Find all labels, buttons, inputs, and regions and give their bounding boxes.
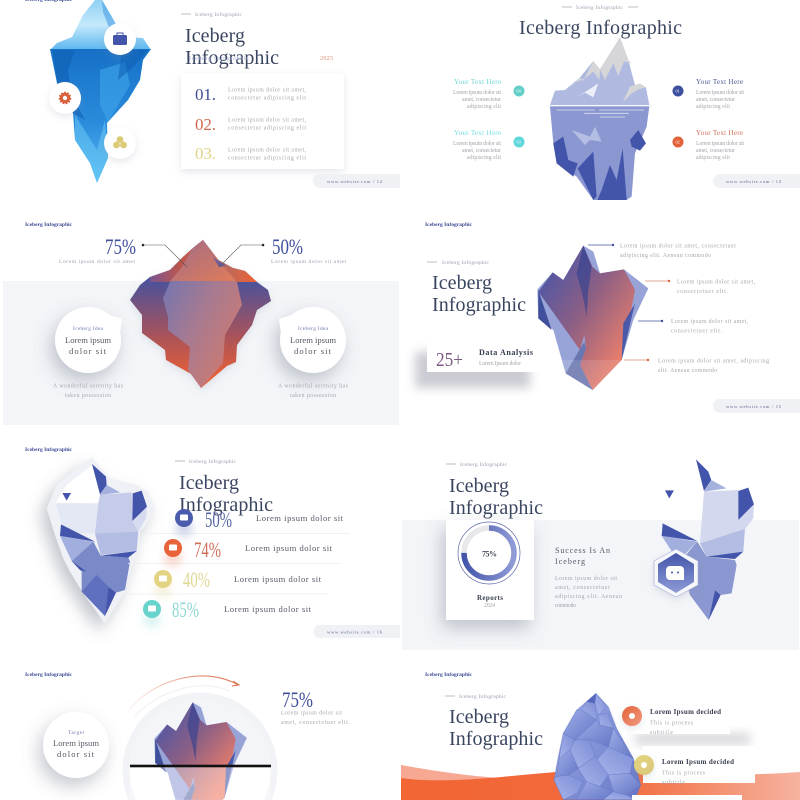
card: item 2: This is process xyxy=(662,770,706,776)
title: Iceberg xyxy=(432,272,492,294)
title: Infographic xyxy=(449,497,543,519)
section label: Iceberg Infographic xyxy=(442,259,490,266)
row: 40%: 40% xyxy=(183,567,210,592)
stat: 75%: amet, consectetuer elit. xyxy=(281,720,351,726)
icon: low-poly iceberg xyxy=(47,457,155,623)
card: numbered list: 03. xyxy=(195,144,216,163)
title xyxy=(432,272,526,316)
title: Iceberg xyxy=(185,25,245,47)
note 3 xyxy=(638,319,749,334)
caption: right: A wonderful serenity has xyxy=(278,382,349,390)
card: item 1 xyxy=(622,706,750,745)
header: Iceberg Infographic xyxy=(25,222,73,228)
footer pill xyxy=(713,174,800,188)
section label xyxy=(445,693,507,700)
waterline xyxy=(130,765,271,767)
text block: success: Lorem ipsum dolor sit xyxy=(555,576,617,582)
footer pill: www.website.com / 15 xyxy=(726,404,782,409)
section label: Iceberg Infographic xyxy=(460,461,508,468)
title: Iceberg xyxy=(449,706,509,728)
footer pill: www.website.com / 12 xyxy=(327,179,383,184)
card: item 1: Lorem Ipsum decided xyxy=(650,708,721,716)
text block: success: commodo xyxy=(555,603,576,609)
icon: faceted iceberg xyxy=(554,693,641,800)
card: reports donut: 2024 xyxy=(484,603,495,609)
title: Infographic xyxy=(179,494,273,516)
card: item 2 xyxy=(634,746,755,786)
water veil xyxy=(130,767,271,800)
card: item 2: subtitle xyxy=(662,780,685,786)
stat: 50%: 50% xyxy=(272,234,303,259)
header: Iceberg Infographic xyxy=(25,672,73,678)
note: right bottom: adipiscing elit xyxy=(696,155,730,161)
icon: briefcase circle xyxy=(104,23,136,55)
stat: 75%: Lorem ipsum dolor sit amet xyxy=(59,259,135,265)
panel: slide 19 faceted iceberg over waves xyxy=(401,672,800,800)
card: 25+ xyxy=(415,342,540,388)
footer pill xyxy=(314,625,400,638)
row: 74%: Lorem ipsum dolor sit xyxy=(245,543,333,553)
note: left bottom: amet, consectetur xyxy=(462,148,501,154)
note: left top xyxy=(453,78,524,110)
footer pill xyxy=(313,174,400,188)
stat: 75% xyxy=(281,687,351,726)
icon: periwinkle iceberg xyxy=(548,37,653,200)
card: reports donut xyxy=(446,520,534,620)
note: right top: 01 xyxy=(676,88,680,94)
note: right bottom xyxy=(672,129,744,161)
note 3: consectetuer elit. xyxy=(671,328,723,334)
faint subtitle: Iceberg Infographic xyxy=(189,55,249,62)
row: 50%: Lorem ipsum dolor sit xyxy=(256,513,344,523)
card: numbered list: consectetur adipiscing elit xyxy=(228,96,306,102)
panel: slide 14 gradient iceberg with percents xyxy=(3,222,399,425)
note: right top: Your Text Here xyxy=(696,78,743,86)
title xyxy=(179,472,273,516)
icon: hexagon chat xyxy=(654,549,698,597)
note: right top: Lorem ipsum dolor sit xyxy=(696,90,744,96)
card: 25+: Data Analysis xyxy=(479,348,533,357)
panel: slide 17 success card xyxy=(402,459,799,650)
card: reports donut: Reports xyxy=(477,594,503,602)
row: 50%: 50% xyxy=(205,507,232,532)
note: left bottom: 03 xyxy=(516,140,521,144)
grey band xyxy=(3,281,399,425)
caption: left: A wonderful serenity has xyxy=(53,382,124,390)
card: numbered list: 01. xyxy=(195,85,216,104)
card: numbered list: consectetur adipiscing elit xyxy=(228,126,306,132)
note 4: Lorem ipsum dolor sit amet, adipiscing xyxy=(658,358,769,364)
footer pill: www.website.com / 16 xyxy=(327,630,383,634)
note: right bottom: Lorem ipsum dolor sit xyxy=(696,141,744,147)
icon: gear circle xyxy=(49,82,81,114)
note: right top: amet, consectetur xyxy=(696,97,735,103)
header: Iceberg Infographic xyxy=(425,672,473,678)
icon: gradient iceberg xyxy=(537,246,648,390)
title: Infographic xyxy=(432,294,526,316)
card: item 2: Lorem Ipsum decided xyxy=(662,758,734,766)
caption: right xyxy=(278,382,349,399)
row: 74%: 74% xyxy=(194,537,221,562)
card: numbered list: Lorem ipsum dolor sit amet, xyxy=(228,88,307,94)
note 3: Lorem ipsum dolor sit amet, xyxy=(671,319,749,325)
note 2: consectetuer elit. xyxy=(677,289,729,295)
caption: left: taken possession xyxy=(65,393,111,399)
title: Iceberg xyxy=(449,475,509,497)
icon: gradient iceberg xyxy=(154,702,247,800)
circle: background disc xyxy=(122,693,278,800)
callout: target: Lorem ipsum xyxy=(53,738,99,748)
callout: right bubble: Lorem ipsum xyxy=(290,335,336,345)
note: left top: amet, consectetur xyxy=(462,97,501,103)
card: reports donut: 75% xyxy=(482,550,497,558)
callout: right bubble: Iceberg Idea xyxy=(298,326,329,332)
section label: Iceberg Infographic xyxy=(189,458,237,465)
stat: 75%: 75% xyxy=(282,687,313,712)
note 4 xyxy=(624,358,769,374)
stat: 75% xyxy=(59,234,187,267)
title xyxy=(449,475,543,519)
note: left bottom xyxy=(453,129,524,161)
icon: clover circle xyxy=(104,127,136,159)
note 1 xyxy=(588,244,736,259)
card: item 1: subtitle xyxy=(650,730,673,736)
stat: 75%: Lorem ipsum dolor sit xyxy=(281,710,342,716)
note: left top: Your Text Here xyxy=(454,78,501,86)
text block: success xyxy=(555,546,622,609)
text block: success: Success Is An xyxy=(555,546,610,555)
caption: left xyxy=(53,382,124,399)
row: 85% xyxy=(143,597,312,627)
section label xyxy=(175,458,237,465)
note: right top xyxy=(672,78,744,110)
callout: left bubble: Lorem ipsum xyxy=(65,335,111,345)
note: right bottom: Your Text Here xyxy=(696,129,743,137)
text block: success: amet, consectetuer xyxy=(555,585,610,591)
caption: right: taken possession xyxy=(290,393,336,399)
note 1: adipiscing elit. Aenean commodo xyxy=(620,253,711,259)
panel: slide 15 iceberg with leader notes xyxy=(415,222,800,413)
icon: low-poly iceberg xyxy=(662,459,754,620)
title: Infographic xyxy=(185,47,279,69)
note: left bottom: Your Text Here xyxy=(454,129,501,137)
note: right bottom: 02 xyxy=(676,140,680,144)
panel: slide 13 iceberg with four notes xyxy=(453,4,800,200)
note: left top: Lorem ipsum dolor sit xyxy=(453,90,501,96)
card: numbered list: Lorem ipsum dolor sit amet, xyxy=(228,148,307,154)
icon: arrows arc xyxy=(128,676,239,716)
note: left bottom: Lorem ipsum dolor sit xyxy=(453,141,501,147)
row: 50% xyxy=(138,507,350,536)
section label: Iceberg Infographic xyxy=(459,693,507,700)
footer pill: www.website.com / 13 xyxy=(726,179,782,184)
row: 85%: 85% xyxy=(172,597,199,622)
card: numbered list: consectetur adipiscing elit xyxy=(228,156,306,162)
waves xyxy=(401,765,800,800)
panel: slide 16 low-poly iceberg with percent list xyxy=(25,447,400,638)
note 1: Lorem ipsum dolor sit amet, consectetuer xyxy=(620,244,736,250)
note: left top: 04 xyxy=(516,88,522,94)
text block: success: adipiscing elit. Aenean xyxy=(555,594,622,600)
callout: left bubble: dolor sit xyxy=(69,346,107,356)
title xyxy=(185,25,279,69)
note: right bottom: amet, consectetur xyxy=(696,148,735,154)
panel: slide 18 target circle xyxy=(25,672,351,800)
note: left top: adipiscing elit xyxy=(467,104,501,110)
note: left bottom: adipiscing elit xyxy=(467,155,501,161)
card: numbered list: Lorem ipsum dolor sit amet, xyxy=(228,118,307,124)
note 2: Lorem ipsum dolor sit amet, xyxy=(677,280,756,286)
card: item 3 xyxy=(632,795,742,800)
callout: target xyxy=(43,712,109,778)
text block: success: Iceberg xyxy=(555,557,585,566)
callout: right bubble: dolor sit xyxy=(294,346,332,356)
stat: 75%: 75% xyxy=(105,234,136,259)
card: 25+: 25+ xyxy=(436,349,463,371)
row: 40%: Lorem ipsum dolor sit xyxy=(234,574,322,584)
section label: Iceberg Infographic xyxy=(195,11,243,18)
title: Iceberg Infographic xyxy=(519,17,682,39)
header: Iceberg Infographic xyxy=(25,447,73,453)
callout: right bubble xyxy=(279,307,346,373)
row: 40% xyxy=(119,567,329,597)
section label xyxy=(181,11,243,18)
stat: 50% xyxy=(219,234,346,267)
note 2 xyxy=(645,280,756,295)
card: numbered list: 02. xyxy=(195,115,216,134)
title: Iceberg xyxy=(179,472,239,494)
icon: gradient iceberg xyxy=(130,240,271,388)
section label xyxy=(427,259,490,266)
note: right top: adipiscing elit xyxy=(696,104,730,110)
row: 74% xyxy=(128,537,340,566)
note 4: elit. Aenean commodo xyxy=(658,368,717,374)
card: numbered list xyxy=(181,73,344,169)
section label xyxy=(562,4,638,11)
card: 25+: Lorem Ipsum dolor xyxy=(479,361,521,367)
title xyxy=(449,706,543,750)
stat: 50%: Lorem ipsum dolor sit amet xyxy=(271,259,346,265)
card: item 1: This is process xyxy=(650,720,694,726)
section label xyxy=(446,461,508,468)
title: Infographic xyxy=(449,728,543,750)
header: Iceberg Infographic xyxy=(425,222,473,228)
callout: target: dolor sit xyxy=(57,749,95,759)
callout: left bubble xyxy=(55,307,122,373)
callout: left bubble: Iceberg Idea xyxy=(73,326,104,332)
grey band xyxy=(402,520,799,650)
footer pill xyxy=(713,399,800,413)
row: 85%: Lorem ipsum dolor sit xyxy=(224,604,312,614)
year: 2025 xyxy=(320,56,333,62)
callout: target: Target xyxy=(68,730,85,736)
panel: slide 12 blue iceberg xyxy=(25,0,400,188)
icon: blue iceberg xyxy=(50,0,151,183)
section label: Iceberg Infographic xyxy=(576,4,624,11)
